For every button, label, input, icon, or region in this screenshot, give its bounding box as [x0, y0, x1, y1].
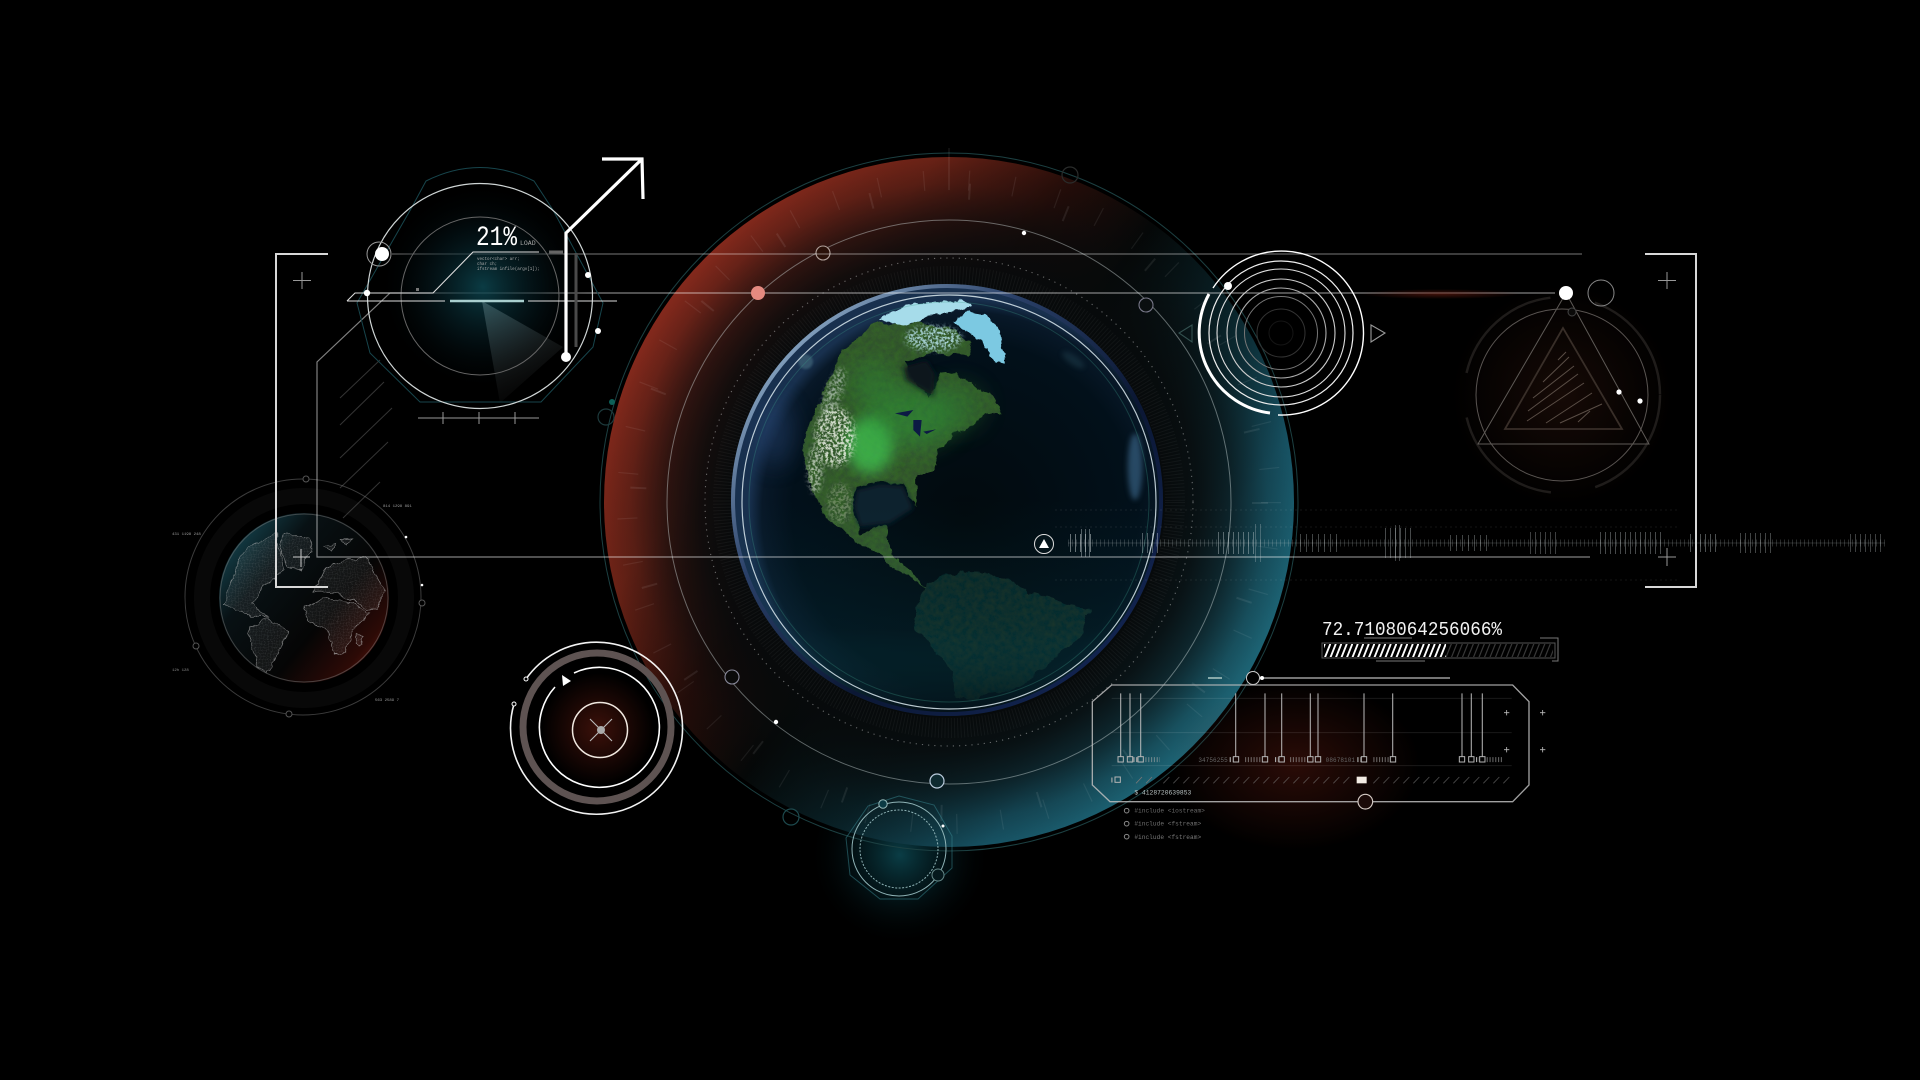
right limb clouds — [1128, 433, 1142, 500]
mini world globe: 563 2589 7 — [375, 699, 400, 703]
triangle marker — [1034, 534, 1054, 554]
triangle right — [1371, 325, 1385, 342]
glow: hud panel — [1170, 680, 1420, 850]
panel node button — [1358, 794, 1373, 809]
frame: corner crosses — [293, 272, 1676, 566]
dial unit: LOAD — [520, 240, 536, 247]
ring node: bottom — [930, 774, 944, 788]
arctic ice — [878, 301, 972, 325]
panel crosses — [1504, 710, 1545, 752]
frame: top line — [392, 253, 1582, 255]
great lakes — [895, 410, 936, 437]
frame lines — [276, 254, 1696, 587]
panel stems — [1121, 693, 1482, 757]
frame: inner contour — [317, 293, 1590, 557]
hud panel: #include <fstream> — [1134, 834, 1201, 841]
globe reticle — [293, 549, 310, 567]
target dial — [511, 642, 683, 814]
HUD scene — [172, 148, 1885, 918]
readout percentage: 72.7108064256066% — [1322, 619, 1503, 641]
hud panel: #include <iostream> — [1134, 808, 1205, 815]
ring node: top — [1062, 167, 1078, 183]
progress bar — [1322, 638, 1558, 661]
frame: diagonal hatch — [340, 360, 392, 518]
central glow — [847, 417, 893, 473]
central ring disc — [598, 148, 1298, 851]
mini world globe: 814 1298 891 — [383, 505, 412, 509]
ring node: dots — [1022, 231, 1026, 235]
dial: load: ifstream infile(argv[1]); — [477, 267, 540, 272]
bottom dial — [846, 796, 952, 899]
dial code: vector<char> arr; — [477, 257, 520, 262]
panel hatch row — [1136, 777, 1152, 783]
slider — [1208, 672, 1450, 684]
ring node: lower left — [725, 670, 739, 684]
continents — [280, 533, 312, 570]
dial nodes — [375, 247, 389, 261]
waveform — [1055, 510, 1885, 580]
panel nodes — [1115, 757, 1485, 782]
glow: signal line — [1360, 289, 1520, 299]
hud panel — [1092, 685, 1545, 841]
glow: teal under bottom dial — [808, 763, 992, 947]
arrow — [561, 159, 643, 362]
snow: rockies — [815, 407, 855, 467]
ring node: upper right — [1139, 298, 1153, 312]
dial: load — [347, 168, 617, 424]
mini world globe — [172, 476, 425, 717]
thick arc — [1199, 294, 1270, 413]
south america landmass — [913, 572, 1090, 698]
hud panel: 08678101 — [1326, 757, 1355, 764]
earth globe — [730, 284, 1170, 730]
peach node — [751, 286, 765, 300]
dial scan lines — [347, 252, 617, 301]
frame: left bracket — [276, 254, 328, 587]
panel numbers: 34756255 — [1198, 757, 1228, 764]
dial value: 21% — [476, 223, 517, 254]
ring node: upper left — [816, 246, 830, 260]
code list — [1124, 808, 1129, 839]
triangle left — [1179, 325, 1192, 342]
target mid arc — [539, 667, 659, 787]
panel barcodes — [1111, 760, 1503, 780]
target outer arc — [511, 642, 683, 814]
hudson bay — [903, 360, 935, 397]
panel id: $ 4128720639853 — [1134, 790, 1191, 797]
hud panel: #include <fstream> — [1134, 821, 1201, 828]
frame: right bracket — [1645, 254, 1696, 587]
globe coordinates: 431 1198 248 — [172, 533, 201, 537]
signal endpoint — [1559, 286, 1573, 300]
globe ring nodes — [303, 476, 309, 482]
triangle dial — [1452, 280, 1672, 505]
gulf — [854, 484, 913, 527]
concentric dial — [1179, 251, 1385, 415]
mini world globe: 12h 128 — [172, 668, 189, 673]
dial ruler — [418, 412, 539, 424]
dial: load: char ch; — [477, 262, 497, 267]
north america landmass — [804, 323, 1003, 588]
